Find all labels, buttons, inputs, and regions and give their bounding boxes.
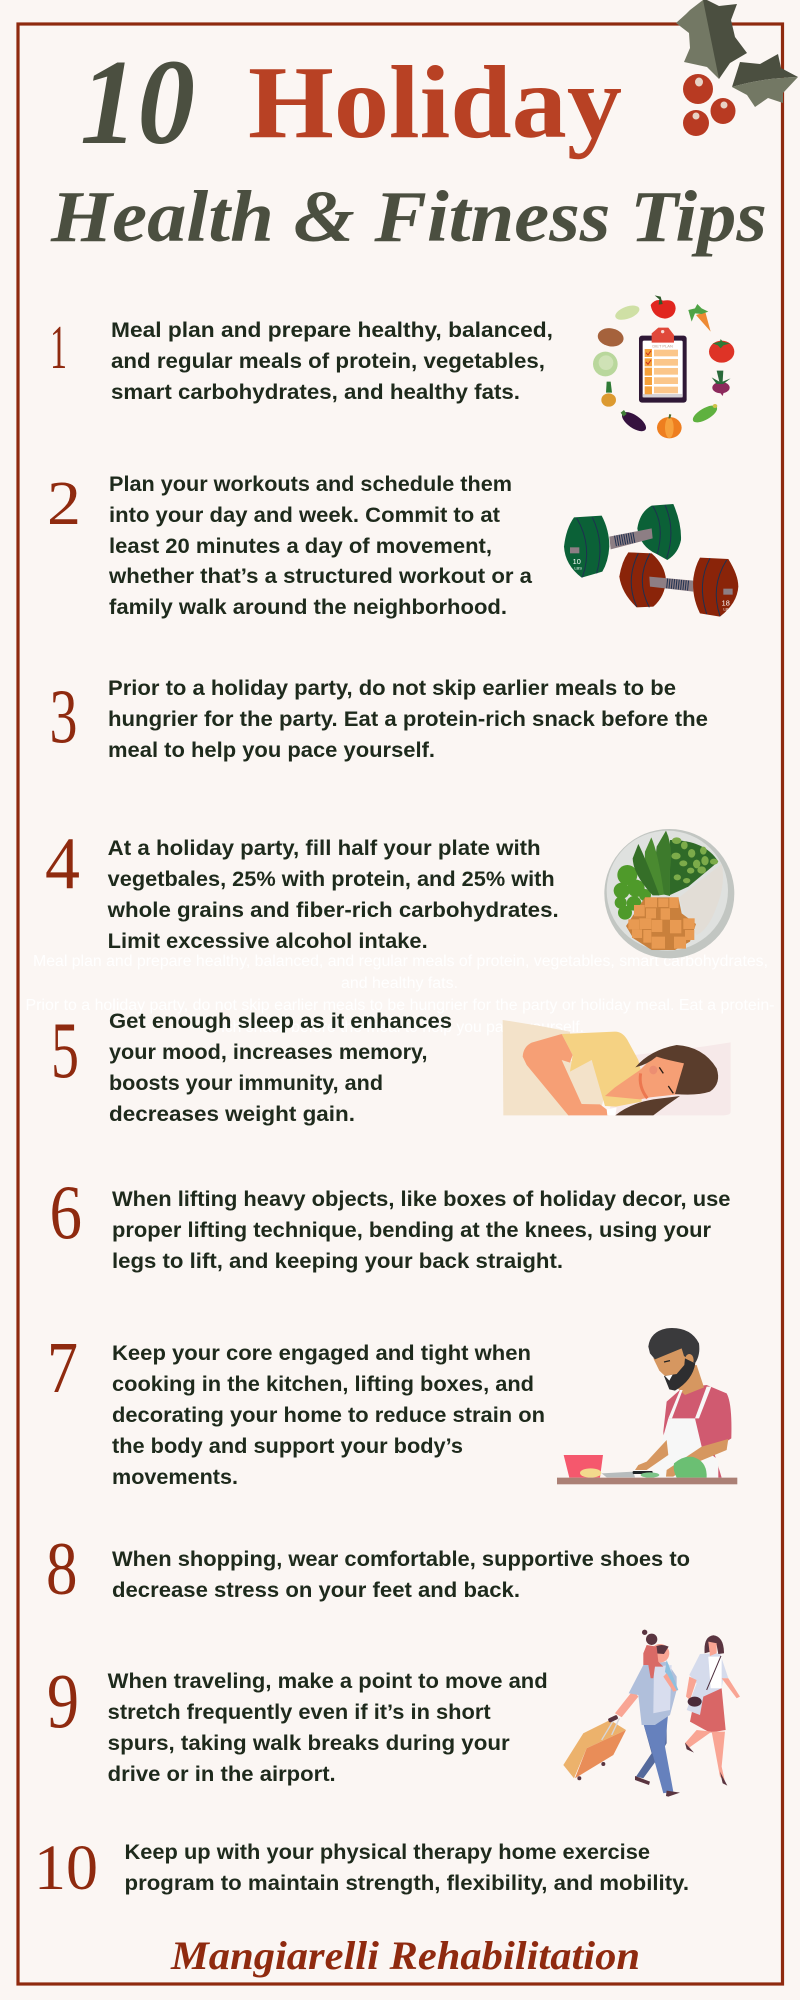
icon: dumbbells (564, 504, 738, 617)
tip 6 text: proper lifting technique, bending at the knees, using your (112, 1218, 712, 1242)
faint overlapping background text: rich snack before the meal to help you pace yourself. (216, 1019, 584, 1036)
number 1: 1 (50, 314, 67, 382)
icon: family traveling with suitcase (563, 1630, 740, 1797)
tip 9 text: spurs, taking walk breaks during your (108, 1731, 510, 1755)
icon: plate of food (604, 829, 734, 958)
tip 8 text (112, 1547, 690, 1602)
icon: dumbbells: LBS (723, 606, 731, 611)
tip 7 text: the body and support your body’s (112, 1434, 463, 1458)
faint overlapping background text (26, 953, 774, 1036)
tip 10 text: program to maintain strength, flexibility, and mobility. (124, 1871, 689, 1895)
tip 9 text: stretch frequently even if it’s in short (108, 1700, 491, 1724)
icon: sleeping woman (503, 1020, 731, 1115)
number 2: 2 (47, 470, 81, 538)
tip 4 text (107, 836, 559, 953)
number 3: 3 (50, 673, 78, 759)
tip 7 text: cooking in the kitchen, lifting boxes, and (112, 1372, 534, 1396)
icon: dumbbells: LBS (574, 565, 582, 570)
tip 10 text (124, 1840, 689, 1895)
tip 10 text: Keep up with your physical therapy home exercise (124, 1840, 650, 1864)
tip 3 text (108, 676, 708, 762)
tip 2 text: least 20 minutes a day of movement, (109, 534, 492, 558)
tip 5 text: decreases weight gain. (109, 1102, 355, 1126)
number 7: 7 (47, 1327, 78, 1408)
tip 9 text (108, 1669, 548, 1786)
number 4: 4 (45, 823, 80, 905)
icon: man cooking (557, 1328, 737, 1484)
tip 7 text: decorating your home to reduce strain on (112, 1403, 545, 1427)
tip 3 text: meal to help you pace yourself. (108, 738, 435, 762)
tip 9 text: When traveling, make a point to move and (108, 1669, 548, 1693)
tip 2 text: family walk around the neighborhood. (109, 595, 507, 619)
tip 2 text: whether that’s a structured workout or a (108, 564, 533, 588)
tip 6 text: When lifting heavy objects, like boxes of holiday decor, use (112, 1187, 731, 1211)
number 5: 5 (51, 1007, 79, 1095)
tip 3 text: hungrier for the party. Eat a protein-rich snack before the (108, 707, 708, 731)
tip 1 text: Meal plan and prepare healthy, balanced, (111, 318, 553, 342)
number 6: 6 (50, 1169, 82, 1255)
tip 2 text: into your day and week. Commit to at (109, 503, 500, 527)
tip 2 text (108, 472, 533, 619)
number 9: 9 (47, 1657, 79, 1744)
tip 8 text: decrease stress on your feet and back. (112, 1578, 520, 1602)
tip 4 text: vegetbales, 25% with protein, and 25% with (108, 867, 555, 891)
number 8: 8 (46, 1528, 78, 1611)
tip 4 text: whole grains and fiber-rich carbohydrates. (107, 898, 559, 922)
faint overlapping background text: Prior to a holiday party, do not skip earlier meals to be hungrier for the party or holiday meal. Eat a protein- (26, 997, 774, 1014)
icon: dumbbells: 18 (722, 598, 730, 607)
tip 5 text: Get enough sleep as it enhances (109, 1009, 452, 1033)
faint overlapping background text: Meal plan and prepare healthy, balanced, and regular meals of protein, vegetables, smart carbohydrates, (33, 953, 768, 970)
tip 7 text: Keep your core engaged and tight when (112, 1341, 531, 1365)
tip 5 text (109, 1009, 452, 1126)
tip 4 text: At a holiday party, fill half your plate with (108, 836, 541, 860)
icon: diet plan clipboard with vegetables: DIET PLAN (652, 344, 673, 349)
faint overlapping background text: and healthy fats. (341, 975, 458, 992)
tip 8 text: When shopping, wear comfortable, supportive shoes to (112, 1547, 690, 1571)
tip 7 text (112, 1341, 545, 1489)
title: Health & Fitness Tips: Health & Fitness Tips (50, 176, 767, 257)
icon: holly leaves and berries (676, 0, 798, 136)
tip 3 text: Prior to a holiday party, do not skip earlier meals to be (108, 676, 676, 700)
footer: Mangiarelli Rehabilitation: Mangiarelli Rehabilitation (170, 1933, 640, 1978)
tip 1 text: and regular meals of protein, vegetables, (111, 349, 545, 373)
icon: dumbbells: 10 (573, 557, 581, 566)
tip 4 text: Limit excessive alcohol intake. (108, 929, 428, 953)
title: 10: 10 (80, 35, 195, 170)
number 10: 10 (34, 1832, 98, 1904)
icon: diet plan clipboard with vegetables (593, 295, 734, 438)
tip 6 text (112, 1187, 731, 1273)
tip 2 text: Plan your workouts and schedule them (109, 472, 512, 496)
tip 9 text: drive or in the airport. (108, 1762, 336, 1786)
tip 6 text: legs to lift, and keeping your back straight. (112, 1249, 563, 1273)
tip 7 text: movements. (112, 1465, 238, 1489)
tip 1 text (111, 318, 553, 404)
tip 1 text: smart carbohydrates, and healthy fats. (111, 380, 520, 404)
tip 5 text: boosts your immunity, and (109, 1071, 383, 1095)
tip 5 text: your mood, increases memory, (109, 1040, 428, 1064)
title: Holiday: Holiday (248, 45, 622, 160)
